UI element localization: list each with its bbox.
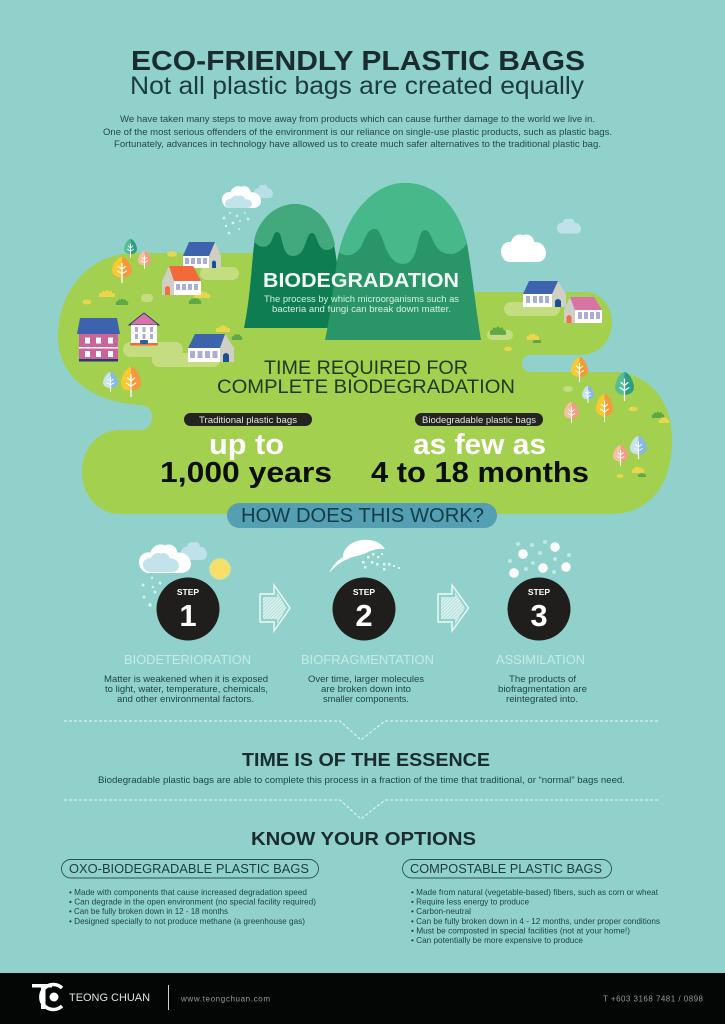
step 1 badge: 1 — [179, 598, 197, 633]
step 3 text: ASSIMILATION — [496, 653, 585, 667]
panel: compostable: COMPOSTABLE PLASTIC BAGS — [410, 861, 602, 876]
panel: compostable: • Can potentially be more expensive to produce — [411, 935, 583, 945]
house: orange roof — [162, 266, 201, 295]
step 1 badge — [156, 578, 220, 640]
stat: biodegradable plastic bags: as few as — [413, 429, 546, 461]
time text: Biodegradable plastic bags are able to complete this process in a fraction of the time that traditional, or “normal” bags need. — [98, 775, 625, 786]
step 3 text: biofragmentation are — [498, 684, 587, 695]
stat: traditional plastic bags: up to — [209, 429, 284, 461]
step 1 icon: cloud, sun and rain — [139, 542, 231, 607]
logo — [32, 984, 62, 1009]
bushes — [99, 290, 669, 477]
panel: oxo-biodegradable: • Designed specially to not produce methane (a greenhouse gas) — [69, 916, 305, 926]
footer — [0, 973, 725, 1024]
step 3 text: The products of — [509, 674, 576, 685]
step 3 badge: STEP — [528, 587, 550, 597]
mountain: right — [325, 183, 481, 340]
panel: compostable: • Require less energy to produce — [411, 896, 529, 906]
step 3 badge — [508, 578, 570, 640]
arrow: step 2 to 3 — [438, 585, 468, 631]
step 1 text: BIODETERIORATION — [124, 653, 251, 667]
heading: know your options: KNOW YOUR OPTIONS — [251, 828, 476, 849]
intro text: We have taken many steps to move away from products which can cause further damage to the world we live in. — [120, 114, 595, 124]
title: ECO-FRIENDLY PLASTIC BAGS — [131, 45, 585, 76]
step 2 icon: leaf breaking apart — [329, 540, 400, 573]
heading: time required: TIME REQUIRED FOR — [264, 357, 468, 379]
intro text: Fortunately, advances in technology have allowed us to create much safer alternatives to the traditional plastic bag. — [114, 139, 601, 149]
panel: oxo-biodegradable: • Can degrade in the open environment (no special facility required) — [69, 896, 316, 906]
trees — [103, 239, 647, 466]
heading pill: how does this work: HOW DOES THIS WORK? — [241, 505, 484, 527]
panel: compostable — [402, 860, 660, 945]
biodegradation description: The process by which microorganisms such as — [264, 294, 459, 305]
house: blue roof lower — [188, 334, 234, 362]
house: blue roof right — [523, 281, 566, 307]
phone: T +603 3168 7481 / 0898 — [603, 994, 704, 1004]
stat: biodegradable plastic bags: 4 to 18 months — [371, 457, 589, 489]
heading: biodegradation: BIODEGRADATION — [263, 270, 459, 292]
house: small white — [129, 313, 159, 346]
step 3 text — [496, 653, 587, 705]
cloud: rain cloud over mountain — [222, 185, 273, 234]
stat: biodegradable plastic bags: Biodegradable plastic bags — [422, 415, 536, 426]
panel: compostable: • Made from natural (vegetable-based) fibers, such as corn or wheat — [411, 887, 659, 897]
step 2 badge — [332, 578, 396, 640]
step 2 badge: STEP — [353, 587, 375, 597]
step 1 text — [104, 653, 268, 705]
house: pink roof right — [564, 297, 602, 323]
panel: oxo-biodegradable: • Made with components that cause increased degradation speed — [69, 887, 307, 897]
website: www.teongchuan.com — [180, 994, 270, 1004]
step 3 text: reintegrated into. — [506, 694, 578, 705]
heading: time is of the essence: TIME IS OF THE ESSENCE — [242, 749, 490, 770]
stat: traditional plastic bags: 1,000 years — [160, 457, 332, 489]
step 2 text: BIOFRAGMENTATION — [301, 653, 434, 667]
step 2 text: are broken down into — [321, 684, 411, 695]
panel: compostable: • Can be fully broken down in 4 - 12 months, under proper conditions — [411, 916, 660, 926]
heading: time required: COMPLETE BIODEGRADATION — [217, 376, 515, 398]
step 1 text: Matter is weakened when it is exposed — [104, 674, 268, 685]
step 3 icon: dots — [508, 540, 571, 578]
subtitle: Not all plastic bags are created equally — [130, 72, 585, 100]
house: blue roof top — [183, 242, 221, 268]
stat: traditional plastic bags — [160, 413, 332, 489]
step 2 text — [301, 653, 434, 705]
heading: time required — [217, 357, 515, 398]
intro text: One of the most serious offenders of the environment is our reliance on single-use plastic products, such as plastic bags. — [103, 127, 612, 137]
stat: traditional plastic bags: Traditional plastic bags — [199, 415, 297, 426]
biodegradation description: bacteria and fungi can break down matter. — [272, 304, 451, 315]
arrow: step 1 to 2 — [260, 585, 290, 631]
intro text — [103, 114, 612, 149]
step 2 text: Over time, larger molecules — [308, 674, 424, 685]
step 2 text: smaller components. — [323, 694, 409, 705]
panel: oxo-biodegradable: • Can be fully broken down in 12 - 18 months — [69, 906, 228, 916]
light ground patches — [123, 267, 573, 392]
biodegradation description — [264, 294, 459, 315]
step 1 text: to light, water, temperature, chemicals, — [105, 684, 268, 695]
house: pink apartment — [77, 318, 120, 362]
landscape island — [58, 253, 672, 514]
panel: oxo-biodegradable — [62, 860, 318, 926]
small yellow spots — [82, 251, 638, 478]
cloud: white right — [501, 234, 546, 262]
panel: compostable: • Must be composted in special facilities (not at your home!) — [411, 926, 630, 936]
stat: biodegradable plastic bags — [371, 413, 589, 489]
cloud: pale right — [557, 219, 581, 234]
step 3 badge: 3 — [530, 598, 548, 633]
brand name: TEONG CHUAN — [69, 992, 150, 1004]
panel: oxo-biodegradable: OXO-BIODEGRADABLE PLASTIC BAGS — [69, 861, 309, 876]
step 1 badge: STEP — [177, 587, 199, 597]
mountain: left — [244, 204, 347, 328]
step 1 text: and other environmental factors. — [117, 694, 254, 705]
panel: compostable: • Carbon-neutral — [411, 906, 471, 916]
step 2 badge: 2 — [355, 598, 373, 633]
